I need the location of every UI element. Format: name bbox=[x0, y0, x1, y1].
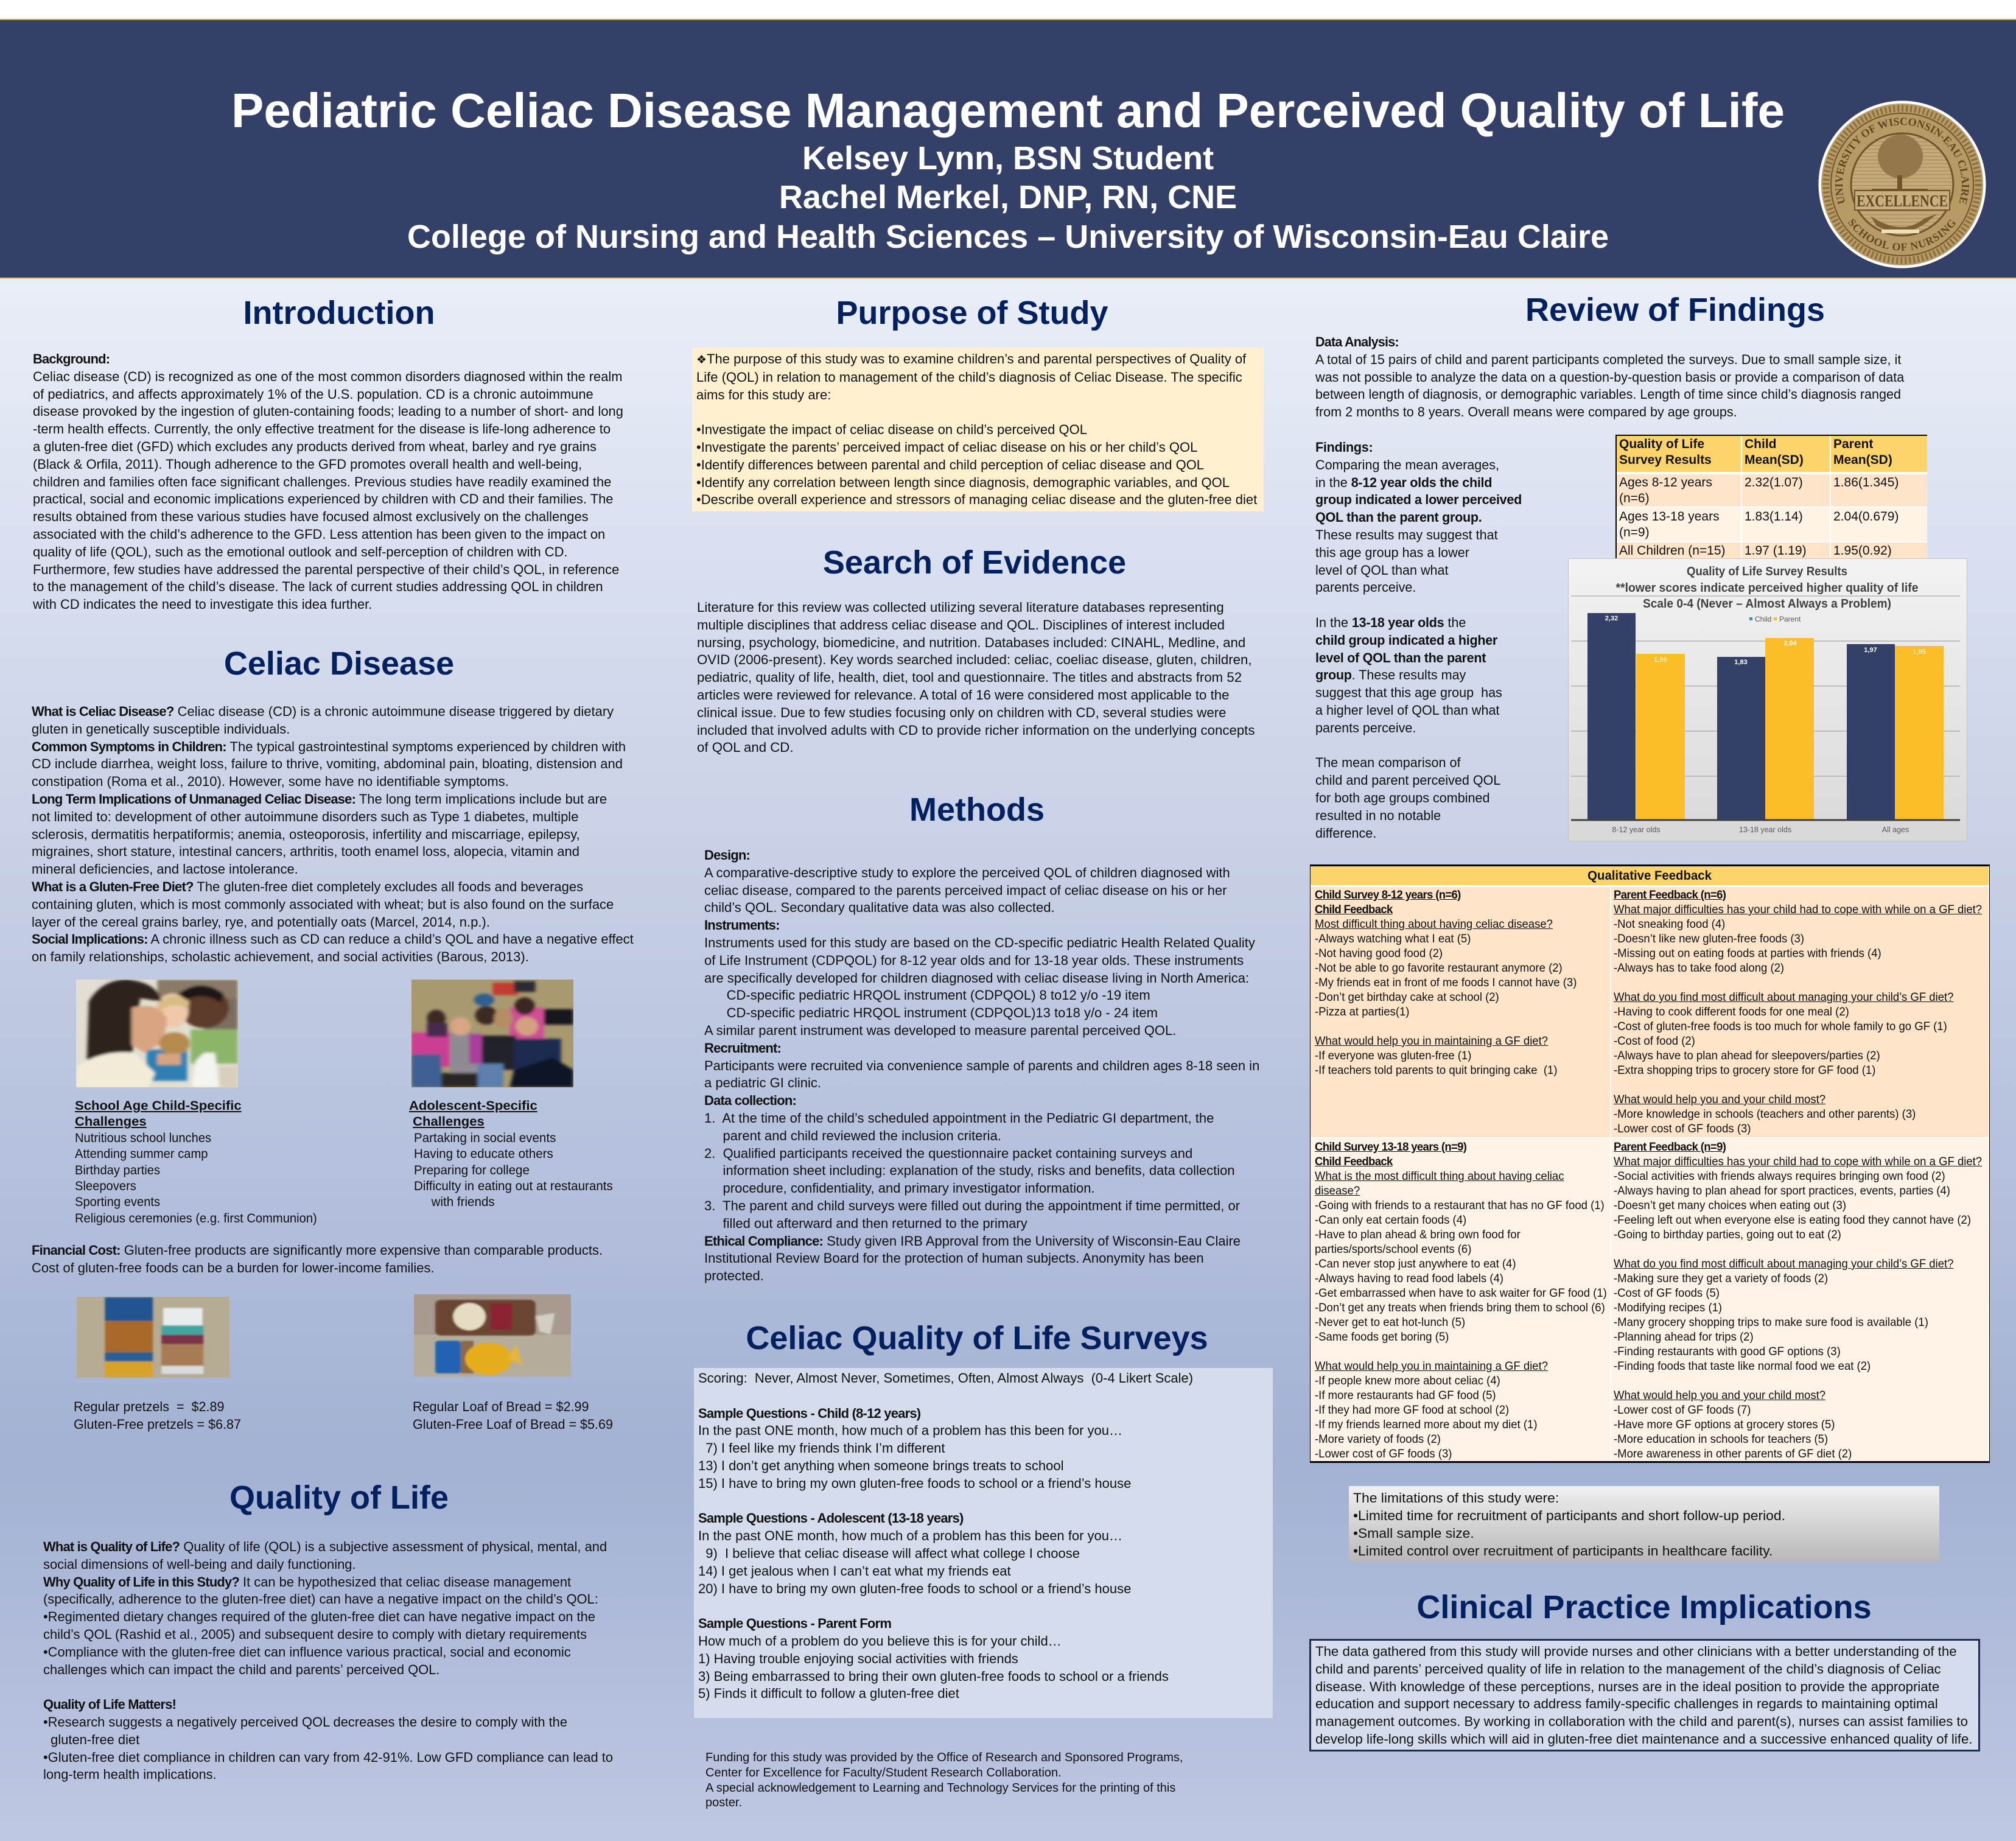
table: qualitative feedback bbox=[1310, 864, 1990, 1463]
table: quality of life survey results: 1.97 (1.19) bbox=[1745, 544, 1807, 558]
icon: university nursing seal: EXCELLENCE bbox=[1857, 192, 1948, 210]
text block: limitations list: The limitations of this study were: •Limited time for recruitment of participants and short follow-up period. •Small sample size. •Limited control over recruitment of participants in healthcare facility. bbox=[1353, 1490, 1785, 1559]
chart category labels: 8-12 year olds bbox=[1612, 826, 1661, 834]
table row: ages 13-18: Ages 13-18 years (n=9) bbox=[1619, 510, 1720, 539]
table title bar bbox=[1311, 866, 1989, 885]
section heading: Celiac Quality of Life Surveys: Celiac Quality of Life Surveys bbox=[746, 1320, 1208, 1356]
text block: funding acknowledgement: Funding for this study was provided by the Office of Research and Sponsored Programs, Center for Excellence for Faculty/Student Research Collaboration. A special acknowledgement to Learning and Technology Services for the printing of this poster. bbox=[705, 1751, 1183, 1809]
text block: celiac disease overview: What is Celiac Disease? Celiac disease (CD) is a chronic autoimmune disease triggered by dietary gluten in genetically susceptible individuals. Common Symptoms in Children: The typical gastrointestinal symptoms experienced by children with CD include diarrhea, weight loss, failure to thrive, vomiting, abdominal pain, bloating, distension and constipation (Roma et al., 2010). However, some have no identifiable symptoms. Long Term Implications of Unmanaged Celiac Disease: The long term implications include but are not limited to: development of other autoimmune disorders such as Type 1 diabetes, multiple sclerosis, dermatitis herpatiformis; anemia, osteoporosis, infertility and miscarriage, epilepsy, migraines, short stature, intestinal cancers, arthritis, tooth enamel loss, alopecia, vitamin and mineral deficiencies, and lactose intolerance. What is a Gluten-Free Diet? The gluten-free diet completely excludes all foods and beverages containing gluten, which is most commonly associated with wheat; but is also found on the surface layer of the cereal grains barley, rye, and potentially oats (Marcel, 2014, n.p.). Social Implications: A chronic illness such as CD can reduce a child’s QOL and have a negative effect on family relationships, scholastic achievement, and social activities (Barous, 2013). bbox=[32, 704, 634, 964]
chart legend: Parent bbox=[1779, 615, 1801, 623]
text block: survey scoring and questions: Scoring: Never, Almost Never, Sometimes, Often, Almost Always (0-4 Likert Scale) Sample Questions - Child (8-12 years) In the past ONE month, how much of a problem has this been for you… 7) I feel like my friends think I’m different 13) I don’t get anything when someone brings treats to school 15) I have to bring my own gluten-free foods to school or a friend’s house Sample Questions - Adolescent (13-18 years) In the past ONE month, how much of a problem has this been for you… 9) I believe that celiac disease will affect what college I choose 14) I get jealous when I can’t eat what my friends eat 20) I have to bring my own gluten-free foods to school or a friend’s house Sample Questions - Parent Form How much of a problem do you believe this is for your child… 1) Having trouble enjoying social activities with friends 3) Being embarrassed to bring their own gluten-free foods to school or a friends 5) Finds it difficult to follow a gluten-free diet bbox=[698, 1370, 1193, 1701]
text block: methods: Design: A comparative-descriptive study to explore the perceived QOL of children diagnosed with celiac disease, compared to the parents perceived impact of celiac disease on his or her child’s QOL. Secondary qualitative data was also collected. Instruments: Instruments used for this study are based on the CD-specific pediatric Health Related Quality of Life Instrument (CDPQOL) for 8-12 year olds and for 13-18 year olds. These instruments are specifically developed for children diagnosed with celiac disease living in North America: CD-specific pediatric HRQOL instrument (CDPQOL) 8 to12 y/o -19 item CD-specific pediatric HRQOL instrument (CDPQOL)13 to18 y/o - 24 item A similar parent instrument was developed to measure parental perceived QOL. Recruitment: Participants were recruited via convenience sample of parents and children ages 8-18 seen in a pediatric GI clinic. Data collection: 1. At the time of the child’s scheduled appointment in the Pediatric GI department, the parent and child reviewed the inclusion criteria. 2. Qualified participants received the questionnaire packet containing surveys and information sheet including: explanation of the study, risks and benefits, data collection procedure, confidentiality, and primary investigator information. 3. The parent and child surveys were filled out during the appointment if time permitted, or filled out afterward and then returned to the primary Ethical Compliance: Study given IRB Approval from the University of Wisconsin-Eau Claire Institutional Review Board for the protection of human subjects. Anonymity has been protected. bbox=[704, 847, 1259, 1283]
icon: university nursing seal: UNIVERSITY OF WISCONSIN-EAU CLAIRE bbox=[1835, 117, 1969, 205]
cell: parent feedback n=9: Parent Feedback (n=9) What major difficulties has your child had to cope with while on a GF diet? -Social activities with friends always requires bringing own food (2) -Always having to plan ahead for sport practices, events, parties (4) -Doesn’t get many choices when eating out (3) -Feeling left out when everyone else is eating food they cannot have (2) -Going to birthday parties, going out to eat (2) What do you find most difficult about managing your child’s GF diet? -Making sure they get a variety of foods (2) -Cost of GF foods (5) -Modifying recipes (1) -Many grocery shopping trips to make sure food is available (1) -Planning ahead for trips (2) -Finding restaurants with good GF options (3) -Finding foods that taste like normal food we eat (2) What would help you and your child most? -Lower cost of GF foods (7) -Have more GF options at grocery stores (5) -More education in schools for teachers (5) -More awareness in other parents of GF diet (2) bbox=[1613, 1140, 1982, 1461]
text block: pretzel prices: Regular pretzels = $2.89 Gluten-Free pretzels = $6.87 bbox=[74, 1399, 241, 1432]
chart legend bbox=[1749, 615, 1801, 623]
icon: university nursing seal bbox=[1819, 101, 1986, 268]
chart category labels: All ages bbox=[1882, 826, 1909, 834]
list: school age challenges: Nutritious school lunches Attending summer camp Birthday parties Sleepovers Sporting events Religious ceremonies (e.g. first Communion) bbox=[75, 1131, 317, 1226]
header banner bbox=[0, 19, 2016, 279]
chart category labels bbox=[1612, 826, 1909, 834]
chart title: Scale 0-4 (Never – Almost Always a Problem) bbox=[1643, 597, 1891, 611]
section heading: Review of Findings: Review of Findings bbox=[1525, 292, 1825, 328]
bars: 8-12 year olds: 1,86 bbox=[1654, 656, 1667, 664]
icon: university nursing seal: SCHOOL OF NURSING bbox=[1848, 219, 1956, 251]
text block: bread prices: Regular Loaf of Bread = $2.99 Gluten-Free Loaf of Bread = $5.69 bbox=[413, 1399, 613, 1432]
cell: child survey 13-18 years: Child Survey 13-18 years (n=9) Child Feedback What is the most difficult thing about having celiac disease? -Going with friends to a restaurant that has no GF food (1) -Can only eat certain foods (4) -Have to plan ahead & bring own food for parties/sports/school events (6) -Can never stop just anywhere to eat (4) -Always having to read food labels (4) -Get embarrassed when have to ask waiter for GF food (1) -Don’t get any treats when friends bring them to school (6) -Never get to eat hot-lunch (5) -Same foods get boring (5) What would help you in maintaining a GF diet? -If people knew more about celiac (4) -If more restaurants had GF food (5) -If they had more GF food at school (2) -If my friends learned more about my diet (1) -More variety of foods (2) -Lower cost of GF foods (3) bbox=[1315, 1140, 1606, 1461]
panel: clinical practice implications bbox=[1309, 1639, 1980, 1752]
table: quality of life survey results: 1.83(1.14) bbox=[1745, 510, 1803, 524]
table header row: Quality of Life Survey Results bbox=[1619, 437, 1712, 467]
table: quality of life survey results bbox=[1615, 435, 1927, 559]
bars: all ages: 1,95 bbox=[1913, 648, 1926, 656]
photo: pretzel bags bbox=[77, 1297, 229, 1378]
table: quality of life survey results: 2.32(1.07) bbox=[1745, 475, 1803, 489]
bars: all ages: 1,97 bbox=[1864, 647, 1877, 654]
text block: school age challenges bbox=[75, 1099, 317, 1226]
text block: quality of life: What is Quality of Life? Quality of life (QOL) is a subjective assessment of physical, mental, and social dimensions of well-being and daily functioning. Why Quality of Life in this Study? It can be hypothesized that celiac disease management (specifically, adherence to the gluten-free diet) can have a negative impact on the child’s QOL: •Regimented dietary changes required of the gluten-free diet can have negative impact on the child’s QOL (Rashid et al., 2005) and subsequent desire to comply with dietary requirements •Compliance with the gluten-free diet can influence various practical, social and economic challenges which can impact the child and parents’ perceived QOL. Quality of Life Matters! •Research suggests a negatively perceived QOL decreases the desire to comply with the gluten-free diet •Gluten-free diet compliance in children can vary from 42-91%. Low GFD compliance can lead to long-term health implications. bbox=[43, 1539, 613, 1782]
photo: adolescent group outdoors bbox=[411, 980, 573, 1087]
section heading: Search of Evidence: Search of Evidence bbox=[823, 544, 1126, 581]
panel: study limitations bbox=[1349, 1486, 1939, 1562]
section heading: Celiac Disease: Celiac Disease bbox=[224, 645, 454, 682]
table: quality of life survey results: 1.95(0.92) bbox=[1833, 544, 1892, 558]
text block: clinical implications: The data gathered from this study will provide nurses and other clinicians with a better understanding of the child and parents’ perceived quality of life in relation to the management of the child’s diagnosis of Celiac disease. With knowledge of these perceptions, nurses are in the ideal position to provide the appropriate education and support necessary to address family-specific challenges in regards to maintaining optimal management outcomes. By working in collaboration with the child and parent(s), nurses can assist families to develop life-long skills which will aid in gluten-free diet maintenance and a successive enhanced quality of life. bbox=[1315, 1644, 1973, 1747]
author line: college: College of Nursing and Health Sciences – University of Wisconsin-Eau Claire bbox=[407, 219, 1609, 255]
chart category labels: 13-18 year olds bbox=[1739, 826, 1791, 834]
table: quality of life survey results: 2.04(0.679) bbox=[1833, 510, 1899, 524]
bars: 13-18 year olds: 1,83 bbox=[1734, 659, 1748, 666]
cell: child survey 8-12 years: Child Survey 8-12 years (n=6) Child Feedback Most difficult thing about having celiac disease? -Always watching what I eat (5) -Not having good food (2) -Not be able to go favorite restaurant anymore (2) -My friends eat in front of me foods I cannot have (3) -Don’t get birthday cake at school (2) -Pizza at parties(1) What would help you in maintaining a GF diet? -If everyone was gluten-free (1) -If teachers told parents to quit bringing cake (1) bbox=[1315, 888, 1577, 1077]
bars: 8-12 year olds: 2,32 bbox=[1605, 615, 1618, 622]
table: quality of life survey results: 1.86(1.345) bbox=[1833, 475, 1899, 489]
text block: financial cost: Financial Cost: Gluten-free products are significantly more expensive than comparable products. Cost of gluten-free foods can be a burden for lower-income families. bbox=[32, 1243, 603, 1275]
cell: parent feedback n=6: Parent Feedback (n=6) What major difficulties has your child had to cope with while on a GF diet? -Not sneaking food (4) -Doesn’t like new gluten-free foods (3) -Missing out on eating foods at parties with friends (4) -Always has to take food along (2) What do you find most difficult about managing your child’s GF diet? -Having to cook different foods for one meal (2) -Cost of gluten-free foods is too much for whole family to go GF (1) -Cost of food (2) -Always have to plan ahead for sleepovers/parties (2) -Extra shopping trips to grocery store for GF food (1) What would help you and your child most? -More knowledge in schools (teachers and other parents) (3) -Lower cost of GF foods (3) bbox=[1613, 888, 1982, 1135]
table row: ages 8-12: Ages 8-12 years (n=6) bbox=[1619, 475, 1712, 505]
list: adolescent challenges: Partaking in social events Having to educate others Preparing for college Difficulty in eating out at restaurants with friends bbox=[414, 1131, 613, 1209]
table title bar: Qualitative Feedback bbox=[1587, 869, 1712, 883]
author line: student: Kelsey Lynn, BSN Student bbox=[802, 140, 1214, 177]
panel: sample survey questions bbox=[694, 1368, 1273, 1718]
photo: bread loaves bbox=[414, 1294, 571, 1376]
subheading: school age challenges: School Age Child-Specific Challenges bbox=[75, 1099, 242, 1129]
chart legend: Child bbox=[1755, 615, 1771, 623]
photo: school age children eating bbox=[76, 980, 238, 1087]
text block: search of evidence: Literature for this review was collected utilizing several literature databases representing multiple disciplines that address celiac disease and QOL. Disciplines of interest included nursing, psychology, biomedicine, and nutrition. Databases included: CINAHL, Medline, and OVID (2006-present). Key words searched included: celiac, coeliac disease, gluten, children, pediatric, quality of life, health, diet, tool and questionnaire. The titles and abstracts from 52 articles were reviewed for relevance. A total of 16 were considered most applicable to the clinical issue. Due to few studies focusing only on children with CD, several studies were included that involved adults with CD to provide richer information on the underlying concepts of QOL and CD. bbox=[697, 600, 1255, 755]
table row: all children: All Children (n=15) bbox=[1619, 544, 1726, 558]
bars: 13-18 year olds: 2,04 bbox=[1783, 640, 1797, 647]
chart title: Quality of Life Survey Results bbox=[1687, 565, 1847, 578]
table: quality of life survey results: Child Mean(SD) bbox=[1745, 437, 1804, 467]
text block: purpose and aims: ❖The purpose of this study was to examine children’s and parental perspectives of Quality of Life (QOL) in relation to management of the child’s diagnosis of Celiac Disease. The specific aims for this study are: •Investigate the impact of celiac disease on child’s perceived QOL •Investigate the parents’ perceived impact of celiac disease on his or her child’s QOL •Identify differences between parental and child perception of celiac disease and QOL •Identify any correlation between length since diagnosis, demographic variables, and QOL •Describe overall experience and stressors of managing celiac disease and the gluten-free diet bbox=[696, 351, 1257, 507]
section heading: Methods: Methods bbox=[909, 791, 1045, 828]
bars: 13-18 year olds bbox=[1717, 638, 1814, 819]
section heading: Introduction: Introduction bbox=[243, 295, 435, 331]
text block: background: Background: Celiac disease (CD) is recognized as one of the most common disorders diagnosed within the realm of pediatrics, and affects approximately 1% of the U.S. population. CD is a chronic autoimmune disease provoked by the ingestion of gluten-containing foods; leading to a number of short- and long -term health effects. Currently, the only effective treatment for the disease is life-long adherence to a gluten-free diet (GFD) which excludes any products derived from wheat, barley and rye grains (Black & Orfila, 2011). Though adherence to the GFD promotes overall health and well-being, children and families often face significant challenges. Previous studies have readily examined the practical, social and economic implications experienced by children with CD and their families. The results obtained from these various studies have focused almost exclusively on the challenges associated with the child’s adherence to the GFD. Less attention has been given to the impact on quality of life (QOL), such as the emotional outlook and self-perception of children with CD. Furthermore, few studies have addressed the parental perspective of their child’s QOL, in reference to the management of the child’s disease. The lack of current studies addressing QOL in children with CD indicates the need to investigate this idea further. bbox=[33, 351, 623, 612]
chart title: **lower scores indicate perceived higher quality of life bbox=[1615, 581, 1919, 595]
poster title: Pediatric Celiac Disease Management and Perceived Quality of Life bbox=[231, 83, 1785, 138]
text block: data analysis: Data Analysis: A total of 15 pairs of child and parent participants completed the surveys. Due to small sample size, it was not possible to analyze the data on a question-by-question basis or provide a comparison of data between length of diagnosis, or demographic variables. Length of time since child’s diagnosis ranged from 2 months to 8 years. Overall means were compared by age groups. bbox=[1315, 334, 1904, 419]
section heading: Purpose of Study: Purpose of Study bbox=[836, 295, 1108, 331]
text block: findings narrative: Findings: Comparing the mean averages, in the 8-12 year olds the child group indicated a lower perceived QOL than the parent group. These results may suggest that this age group has a lower level of QOL than what parents perceive. In the 13-18 year olds the child group indicated a higher level of QOL than the parent group. These results may suggest that this age group has a higher level of QOL than what parents perceive. The mean comparison of child and parent perceived QOL for both age groups combined resulted in no notable difference. bbox=[1315, 440, 1522, 841]
table: quality of life survey results: Parent Mean(SD) bbox=[1833, 437, 1892, 467]
bar chart: quality of life survey results bbox=[1568, 558, 1967, 841]
chart title bbox=[1615, 565, 1919, 611]
section heading: Quality of Life: Quality of Life bbox=[229, 1479, 449, 1516]
text block: adolescent challenges bbox=[409, 1099, 613, 1209]
bars: 8-12 year olds bbox=[1587, 613, 1685, 819]
subheading: adolescent challenges: Adolescent-Specific Challenges bbox=[409, 1099, 537, 1129]
author line: faculty: Rachel Merkel, DNP, RN, CNE bbox=[779, 179, 1237, 216]
bars: all ages bbox=[1847, 644, 1944, 819]
panel: purpose of study bbox=[692, 348, 1264, 511]
section heading: Clinical Practice Implications: Clinical Practice Implications bbox=[1416, 1589, 1872, 1625]
